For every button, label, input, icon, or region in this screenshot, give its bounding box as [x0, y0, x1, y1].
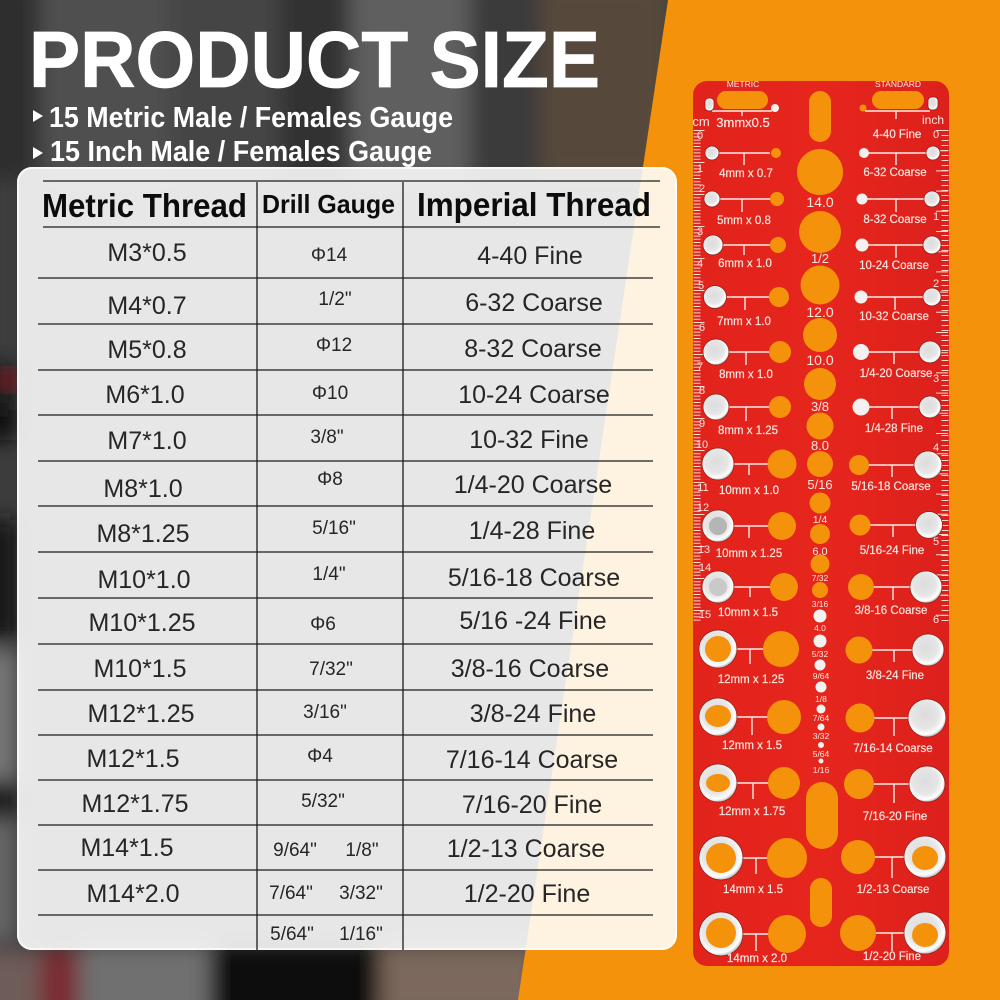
metric gauge 8mm x 1.0: 8mm x 1.0: [719, 369, 773, 381]
inch ruler: 1: [933, 211, 939, 223]
column: drill gauge: Φ14: [311, 245, 348, 266]
column: drill gauge: Φ12: [316, 335, 352, 356]
centimetre ruler: 0: [697, 130, 703, 142]
centimetre ruler: 3: [697, 226, 703, 238]
centimetre ruler: 7: [697, 361, 703, 373]
centre drill labels: 3/32: [813, 731, 830, 741]
centimetre ruler: 10: [696, 439, 708, 451]
metric gauge 12mm x 1.75: 12mm x 1.75: [719, 806, 785, 818]
column: drill gauge: 7/32": [309, 659, 353, 680]
standard gauge 3/8-24: 3/8-24 Fine: [866, 670, 924, 682]
centimetre ruler: [692, 114, 711, 622]
column: imperial thread: 10-32 Fine: [469, 426, 589, 454]
column: metric thread: M6*1.0: [105, 381, 185, 409]
centre drill labels: 6.0: [812, 546, 828, 558]
centimetre ruler: 8: [699, 385, 705, 397]
column: metric thread: M14*1.5: [80, 834, 174, 862]
centimetre ruler: cm: [692, 114, 710, 129]
column: drill gauge: 1/4": [312, 564, 346, 585]
standard gauge 5/16-24: 5/16-24 Fine: [860, 545, 924, 557]
standard gauge 1/4-20: [853, 341, 941, 380]
inch ruler: [922, 113, 945, 626]
centimetre ruler: 9: [699, 418, 705, 430]
centre drill labels: 7/32: [812, 573, 829, 583]
panel: thread table: [17, 167, 677, 950]
column: metric thread: M5*0.8: [107, 336, 187, 364]
metric gauge 3mm: 3mmx0.5: [716, 115, 770, 130]
metric gauge 4mm: 4mm x 0.7: [719, 168, 773, 180]
metric gauge 14mm x 1.5: [699, 836, 807, 896]
metric gauge 14mm x 2.0: [699, 912, 806, 965]
standard gauge 6-32: [859, 146, 940, 179]
inch ruler: 3: [933, 373, 939, 385]
metric gauge 14mm x 1.5: 14mm x 1.5: [723, 884, 783, 896]
standard gauge 1/4-28: 1/4-28 Fine: [865, 423, 923, 435]
standard gauge 3/8-16: 3/8-16 Coarse: [855, 605, 927, 617]
standard gauge 8-32: 8-32 Coarse: [863, 214, 927, 226]
centimetre ruler: 11: [697, 482, 709, 494]
column: metric thread: M12*1.25: [87, 700, 195, 728]
column: imperial thread: 3/8-24 Fine: [470, 700, 596, 728]
inch ruler: 4: [933, 442, 939, 454]
column: imperial thread: 10-24 Coarse: [458, 381, 610, 409]
column: imperial thread: 1/4-28 Fine: [469, 517, 595, 545]
metric gauge 7mm: [704, 286, 789, 328]
metric gauge 10mm x 1.0: [702, 448, 796, 497]
table header: Metric Thread: [42, 187, 247, 224]
column: drill gauge: 3/32": [339, 883, 383, 904]
standard gauge 10-32: [854, 288, 941, 323]
metric gauge 10mm x 1.5: 10mm x 1.5: [718, 607, 778, 619]
table header: Drill Gauge: [262, 189, 395, 219]
standard gauge 7/16-20: [844, 766, 945, 823]
centre drill labels: 12.0: [806, 304, 834, 320]
metric gauge 12mm x 1.25: [699, 630, 799, 686]
centimetre ruler: 14: [699, 562, 711, 574]
metric gauge 10mm x 1.25: 10mm x 1.25: [716, 548, 782, 560]
metric gauge 8mm x 1.25: 8mm x 1.25: [718, 425, 778, 437]
column: imperial thread: 7/16-20 Fine: [462, 791, 602, 819]
column: drill gauge: Φ6: [310, 614, 336, 635]
centre drill labels: 8.0: [811, 438, 829, 453]
table header: [42, 186, 651, 224]
standard gauge 3/8-16: [848, 571, 942, 617]
metric gauge 12mm x 1.5: 12mm x 1.5: [722, 740, 782, 752]
centre drill labels: 3/8: [811, 399, 829, 414]
centimetre ruler: 15: [699, 609, 711, 621]
metric gauge 8mm x 1.0: [703, 339, 791, 381]
standard gauge 1/4-20: 1/4-20 Coarse: [860, 368, 932, 380]
metric gauge 3mm: METRIC: [727, 79, 759, 89]
centimetre ruler: 1: [697, 163, 703, 175]
column: drill gauge: 5/32": [301, 791, 345, 812]
column: drill gauge: Φ4: [307, 746, 333, 767]
column: imperial thread: 1/4-20 Coarse: [454, 471, 612, 499]
column: imperial thread: [446, 242, 620, 908]
standard gauge 1/2-20: 1/2-20 Fine: [863, 951, 921, 963]
standard gauge 1/2-13: [841, 836, 946, 896]
column: imperial thread: 8-32 Coarse: [464, 335, 602, 363]
column: drill gauge: 1/16": [339, 924, 383, 945]
inch ruler: 5: [933, 536, 939, 548]
centre drill labels: 5/32: [812, 649, 829, 659]
column: drill gauge: 1/8": [345, 840, 379, 861]
metric gauge 6mm: 6mm x 1.0: [718, 258, 772, 270]
column: imperial thread: 4-40 Fine: [477, 242, 583, 270]
column: drill gauge: [269, 245, 383, 945]
standard gauge 4-40: STANDARD: [875, 79, 921, 89]
metric gauge 10mm x 1.25: [702, 510, 796, 560]
standard gauge 4-40: 4-40 Fine: [873, 129, 921, 141]
column: drill gauge: 5/16": [312, 518, 356, 539]
column: imperial thread: 5/16 -24 Fine: [459, 607, 607, 635]
column: imperial thread: 1/2-13 Coarse: [447, 835, 605, 863]
standard gauge 5/16-18: 5/16-18 Coarse: [851, 481, 931, 493]
column: metric thread: [80, 239, 196, 908]
metric gauge 10mm x 1.5: [702, 571, 798, 619]
centre drill labels: 1/16: [813, 765, 830, 775]
column: metric thread: M12*1.5: [86, 745, 180, 773]
inch ruler: 2: [933, 278, 939, 290]
metric gauge 3mm: [705, 79, 779, 130]
centre drill labels: 14.0: [806, 194, 834, 210]
inch ruler: 6: [933, 614, 939, 626]
column: metric thread: M14*2.0: [86, 880, 180, 908]
metric gauge 5mm: 5mm x 0.8: [717, 215, 771, 227]
centimetre ruler: 5: [698, 280, 704, 292]
metric gauge 6mm: [703, 235, 786, 270]
metric gauge 4mm: [705, 146, 781, 180]
standard gauge 5/16-18: [849, 451, 942, 493]
column: imperial thread: 5/16-18 Coarse: [448, 564, 620, 592]
inch ruler: 0: [933, 129, 939, 141]
column: drill gauge: 5/64": [270, 924, 314, 945]
centre drill labels: 1/2: [811, 251, 829, 266]
centre drill labels: 10.0: [806, 352, 834, 368]
centimetre ruler: 13: [698, 544, 710, 556]
metric gauge 5mm: [704, 191, 784, 227]
centre drill labels: 5/16: [807, 477, 833, 492]
column: metric thread: M3*0.5: [107, 239, 187, 267]
panel: red gauge plate: [692, 79, 949, 966]
metric gauge 12mm x 1.75: [699, 764, 800, 818]
metric gauge 7mm: 7mm x 1.0: [717, 316, 771, 328]
column: metric thread: M10*1.5: [93, 655, 187, 683]
standard gauge 5/16-24: [850, 512, 942, 557]
column: metric thread: M8*1.25: [96, 520, 190, 548]
centre drill labels: 3/16: [812, 599, 829, 609]
column: imperial thread: 6-32 Coarse: [465, 289, 603, 317]
column: drill gauge: Φ8: [317, 469, 343, 490]
centre drill labels: [806, 194, 834, 775]
title: PRODUCT SIZE: [29, 15, 600, 104]
column: imperial thread: 7/16-14 Coarse: [446, 746, 618, 774]
centre drill labels: 1/4: [813, 514, 827, 526]
standard gauge 7/16-14: 7/16-14 Coarse: [853, 743, 933, 755]
centimetre ruler: 2: [699, 183, 705, 195]
standard gauge 7/16-14: [846, 699, 946, 755]
column: drill gauge: 7/64": [269, 883, 313, 904]
column: drill gauge: 3/16": [303, 702, 347, 723]
centimetre ruler: 6: [699, 322, 705, 334]
column: drill gauge: 3/8": [310, 427, 344, 448]
column: imperial thread: 3/8-16 Coarse: [451, 655, 609, 683]
metric gauge 12mm x 1.25: 12mm x 1.25: [718, 674, 784, 686]
column: metric thread: M4*0.7: [107, 292, 187, 320]
bullet: metric gauges: 15 Metric Male / Females Gauge: [49, 102, 453, 134]
inch ruler: inch: [922, 113, 944, 127]
metric gauge 12mm x 1.5: [699, 698, 801, 752]
centre drill labels: 4.0: [814, 623, 826, 633]
column: drill gauge: 9/64": [273, 840, 317, 861]
column: metric thread: M8*1.0: [103, 475, 183, 503]
bullet: inch gauges: 15 Inch Male / Females Gauge: [50, 136, 432, 168]
standard gauge 1/2-20: [840, 912, 946, 963]
column: drill gauge: Φ10: [312, 383, 348, 404]
standard gauge 10-32: 10-32 Coarse: [859, 311, 929, 323]
standard gauge 10-24: 10-24 Coarse: [859, 260, 929, 272]
centre drill labels: 7/64: [813, 713, 830, 723]
metric gauge 14mm x 2.0: 14mm x 2.0: [727, 953, 787, 965]
standard gauge 8-32: [856, 191, 940, 226]
metric gauge 10mm x 1.0: 10mm x 1.0: [719, 485, 779, 497]
column: metric thread: M7*1.0: [107, 427, 187, 455]
standard gauge 4-40: [860, 79, 938, 141]
standard gauge 10-24: [856, 236, 941, 272]
centre drill labels: 1/8: [815, 694, 827, 704]
table header: Imperial Thread: [417, 186, 651, 223]
centre drill labels: 5/64: [813, 749, 830, 759]
standard gauge 7/16-20: 7/16-20 Fine: [863, 811, 927, 823]
centimetre ruler: 4: [697, 258, 703, 270]
standard gauge 3/8-24: [846, 634, 944, 682]
column: metric thread: M10*1.0: [97, 566, 191, 594]
orange background: [518, 0, 1000, 1000]
standard gauge 6-32: 6-32 Coarse: [863, 167, 927, 179]
centimetre ruler: 12: [697, 502, 709, 514]
centre drill labels: 9/64: [813, 671, 830, 681]
standard gauge 1/2-13: 1/2-13 Coarse: [857, 884, 929, 896]
standard gauge 1/4-28: [852, 396, 941, 435]
column: imperial thread: 1/2-20 Fine: [464, 880, 590, 908]
centre drill holes: [797, 91, 843, 927]
metric gauge 8mm x 1.25: [703, 394, 791, 437]
column: drill gauge: 1/2": [318, 289, 352, 310]
column: metric thread: M10*1.25: [88, 609, 196, 637]
column: metric thread: M12*1.75: [81, 790, 189, 818]
